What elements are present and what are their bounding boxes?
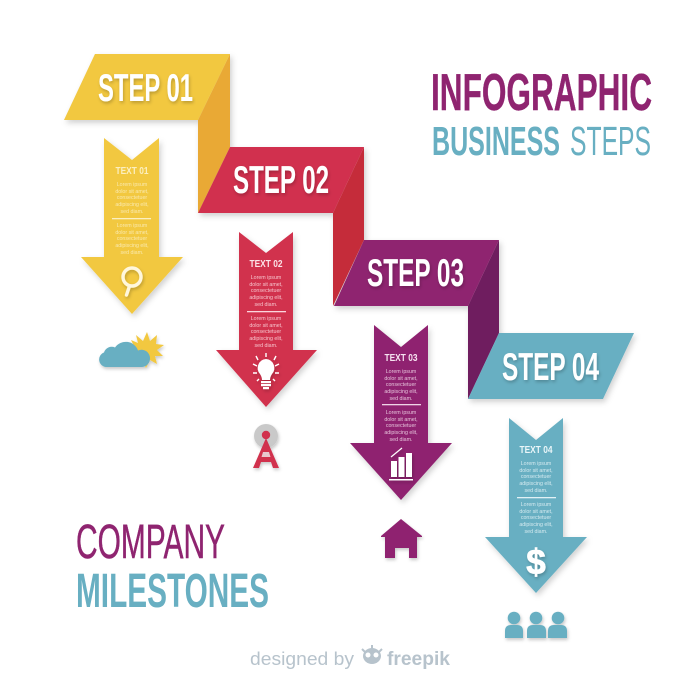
arrow panel 02: dolor sit amet, xyxy=(249,282,283,288)
ribbon: step 01: STEP 01 xyxy=(98,67,193,110)
ribbon: step 04 xyxy=(468,333,634,399)
arrow panel 01: Lorem ipsum xyxy=(117,182,148,188)
arrow panel 03: adipiscing elit, xyxy=(384,389,418,395)
arrow panel 02 xyxy=(216,232,317,407)
arrow panel 01: consectetuer xyxy=(117,195,147,201)
arrow panel 03: TEXT 03 xyxy=(384,353,418,364)
icon: house xyxy=(381,519,422,558)
fold: purple to blue xyxy=(468,240,499,399)
ribbon shadows xyxy=(64,54,634,399)
arrow panel 04: adipiscing elit, xyxy=(519,481,553,487)
arrow panel 04: dolor sit amet, xyxy=(519,509,553,515)
arrow panel 01: adipiscing elit, xyxy=(115,202,149,208)
arrow panel 03: consectetuer xyxy=(386,382,416,388)
arrow panel 01: Lorem ipsum xyxy=(117,223,148,229)
icon: signal tower xyxy=(253,424,279,468)
arrow panel 04: sed diam. xyxy=(525,488,547,494)
arrow panel 04: sed diam. xyxy=(525,529,547,535)
arrow panel 03 xyxy=(350,325,452,500)
arrow panel 04: adipiscing elit, xyxy=(519,522,553,528)
arrow panel 03: sed diam. xyxy=(390,437,412,443)
arrow panel 03: consectetuer xyxy=(386,423,416,429)
arrow panel 03: adipiscing elit, xyxy=(384,430,418,436)
arrow panel 01: sed diam. xyxy=(121,209,143,215)
title: company milestones: MILESTONES xyxy=(76,565,269,618)
icon: bar chart xyxy=(389,448,413,480)
ribbon: step 02 xyxy=(198,147,364,213)
arrow panel 03: dolor sit amet, xyxy=(384,376,418,382)
arrow panel 04 xyxy=(485,418,587,593)
arrow panel 01: dolor sit amet, xyxy=(115,230,149,236)
arrow panel 04: consectetuer xyxy=(521,515,551,521)
arrow panel 03: sed diam. xyxy=(390,396,412,402)
arrow panel 04: Lorem ipsum xyxy=(521,461,552,467)
title: infographic business steps: BUSINESS xyxy=(432,118,560,164)
arrow panel 03: dolor sit amet, xyxy=(384,417,418,423)
icon: people xyxy=(505,612,567,638)
arrow panel 01: dolor sit amet, xyxy=(115,189,149,195)
arrow panel 03: Lorem ipsum xyxy=(386,410,417,416)
arrow panel 02: sed diam. xyxy=(255,302,277,308)
arrow panel 02: adipiscing elit, xyxy=(249,295,283,301)
arrow panel 04: dolor sit amet, xyxy=(519,468,553,474)
ribbon: step 03 xyxy=(334,240,499,306)
arrow panel 02: TEXT 02 xyxy=(250,259,283,270)
arrow panel 02: consectetuer xyxy=(251,288,281,294)
arrow panel 01: sed diam. xyxy=(121,250,143,256)
icon: light bulb xyxy=(253,353,279,389)
fold: yellow to red xyxy=(198,54,230,213)
ribbon: step 04: STEP 04 xyxy=(502,346,599,389)
icon: magnifier xyxy=(123,268,141,295)
title: company milestones: COMPANY xyxy=(76,516,225,569)
arrow panel 04: TEXT 04 xyxy=(520,445,553,456)
arrow panel 02: sed diam. xyxy=(255,343,277,349)
arrow panel 03: Lorem ipsum xyxy=(386,369,417,375)
arrow panel 01 xyxy=(81,138,183,314)
credit: designed by freepik xyxy=(250,645,450,670)
icon: dollar: $ xyxy=(526,543,546,582)
ribbon: step 01 xyxy=(64,54,230,120)
title: company milestones xyxy=(76,516,269,618)
credit: designed by freepik: freepik xyxy=(387,649,450,670)
icon: cloud and sun xyxy=(99,332,164,368)
arrow panel 02: adipiscing elit, xyxy=(249,336,283,342)
arrow panel 02: Lorem ipsum xyxy=(251,316,282,322)
ribbon: step 03: STEP 03 xyxy=(367,252,464,295)
arrow panel 02: consectetuer xyxy=(251,329,281,335)
arrow panel 01: adipiscing elit, xyxy=(115,243,149,249)
arrow panel 01: TEXT 01 xyxy=(116,166,149,177)
arrow panel 04: consectetuer xyxy=(521,474,551,480)
credit: designed by freepik: designed by xyxy=(250,649,354,669)
ribbon: step 02: STEP 02 xyxy=(233,159,329,202)
fold: red to purple xyxy=(333,147,364,306)
arrow panel 02: Lorem ipsum xyxy=(251,275,282,281)
arrow panel 04: Lorem ipsum xyxy=(521,502,552,508)
arrow panel 01: consectetuer xyxy=(117,236,147,242)
title: infographic business steps xyxy=(431,64,652,164)
arrow panel 02: dolor sit amet, xyxy=(249,323,283,329)
